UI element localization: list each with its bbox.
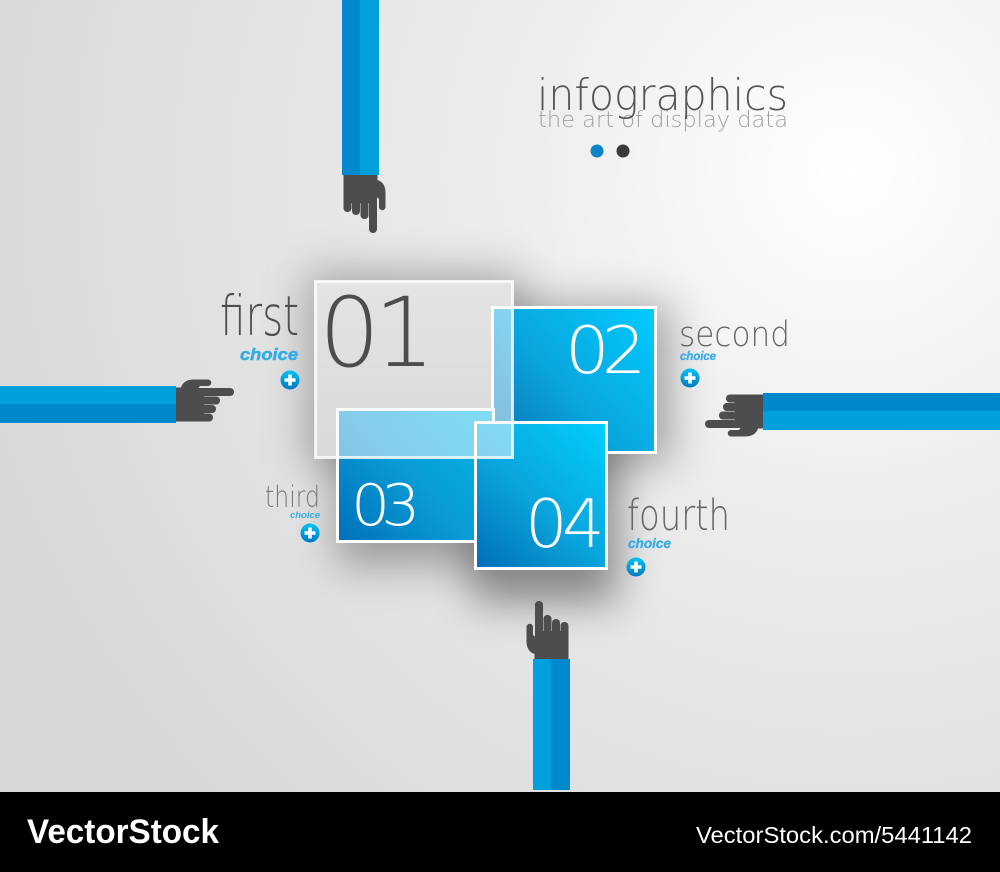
plus button bbox=[300, 524, 320, 542]
label: third: third bbox=[265, 480, 320, 514]
choice tag: choice bbox=[680, 351, 717, 363]
plus button bbox=[626, 558, 646, 576]
number 03: 0 bbox=[351, 472, 390, 538]
card 04 bbox=[476, 422, 606, 568]
number 04: 0 bbox=[525, 485, 568, 563]
number 01: 0 bbox=[319, 277, 380, 389]
label: third bbox=[265, 480, 320, 542]
title: infographics bbox=[537, 70, 788, 121]
plus button bbox=[280, 370, 300, 390]
card 03 bbox=[338, 410, 494, 542]
hand: right pointing left bbox=[705, 394, 763, 436]
label: first bbox=[220, 284, 300, 390]
label: second bbox=[679, 315, 790, 388]
arm: right bbox=[763, 393, 1000, 430]
footer bar bbox=[0, 792, 1000, 872]
subtitle: the art of display data bbox=[538, 108, 788, 133]
number 02: 0 bbox=[565, 312, 610, 388]
arm: left bbox=[0, 386, 176, 423]
number 01: 1 bbox=[374, 277, 435, 389]
number 03: 3 bbox=[381, 472, 420, 538]
footer url: VectorStock.com/5441142 bbox=[696, 822, 972, 848]
label: second: second bbox=[679, 315, 790, 355]
choice tag: choice bbox=[628, 536, 671, 551]
arm: bottom bbox=[533, 659, 570, 790]
title block bbox=[537, 70, 788, 133]
card shadows bbox=[306, 272, 671, 602]
label: first: first bbox=[220, 284, 299, 348]
choice tag: choice bbox=[240, 345, 298, 364]
arm: top bbox=[342, 0, 379, 175]
hand: left pointing right bbox=[176, 380, 234, 422]
card 02 bbox=[492, 308, 656, 452]
label: fourth bbox=[626, 491, 730, 576]
plus button bbox=[680, 368, 700, 388]
label: fourth: fourth bbox=[627, 491, 730, 541]
choice tag: choice bbox=[290, 510, 320, 520]
hand: top pointing down bbox=[344, 175, 386, 233]
number 04: 4 bbox=[562, 485, 605, 563]
number 02: 2 bbox=[602, 312, 646, 388]
pagination dots bbox=[590, 144, 630, 158]
card 01 backing bbox=[314, 280, 514, 459]
hand: bottom pointing up bbox=[526, 601, 568, 659]
card 01 glass bbox=[316, 277, 512, 458]
footer logo: VectorStock bbox=[27, 813, 219, 851]
